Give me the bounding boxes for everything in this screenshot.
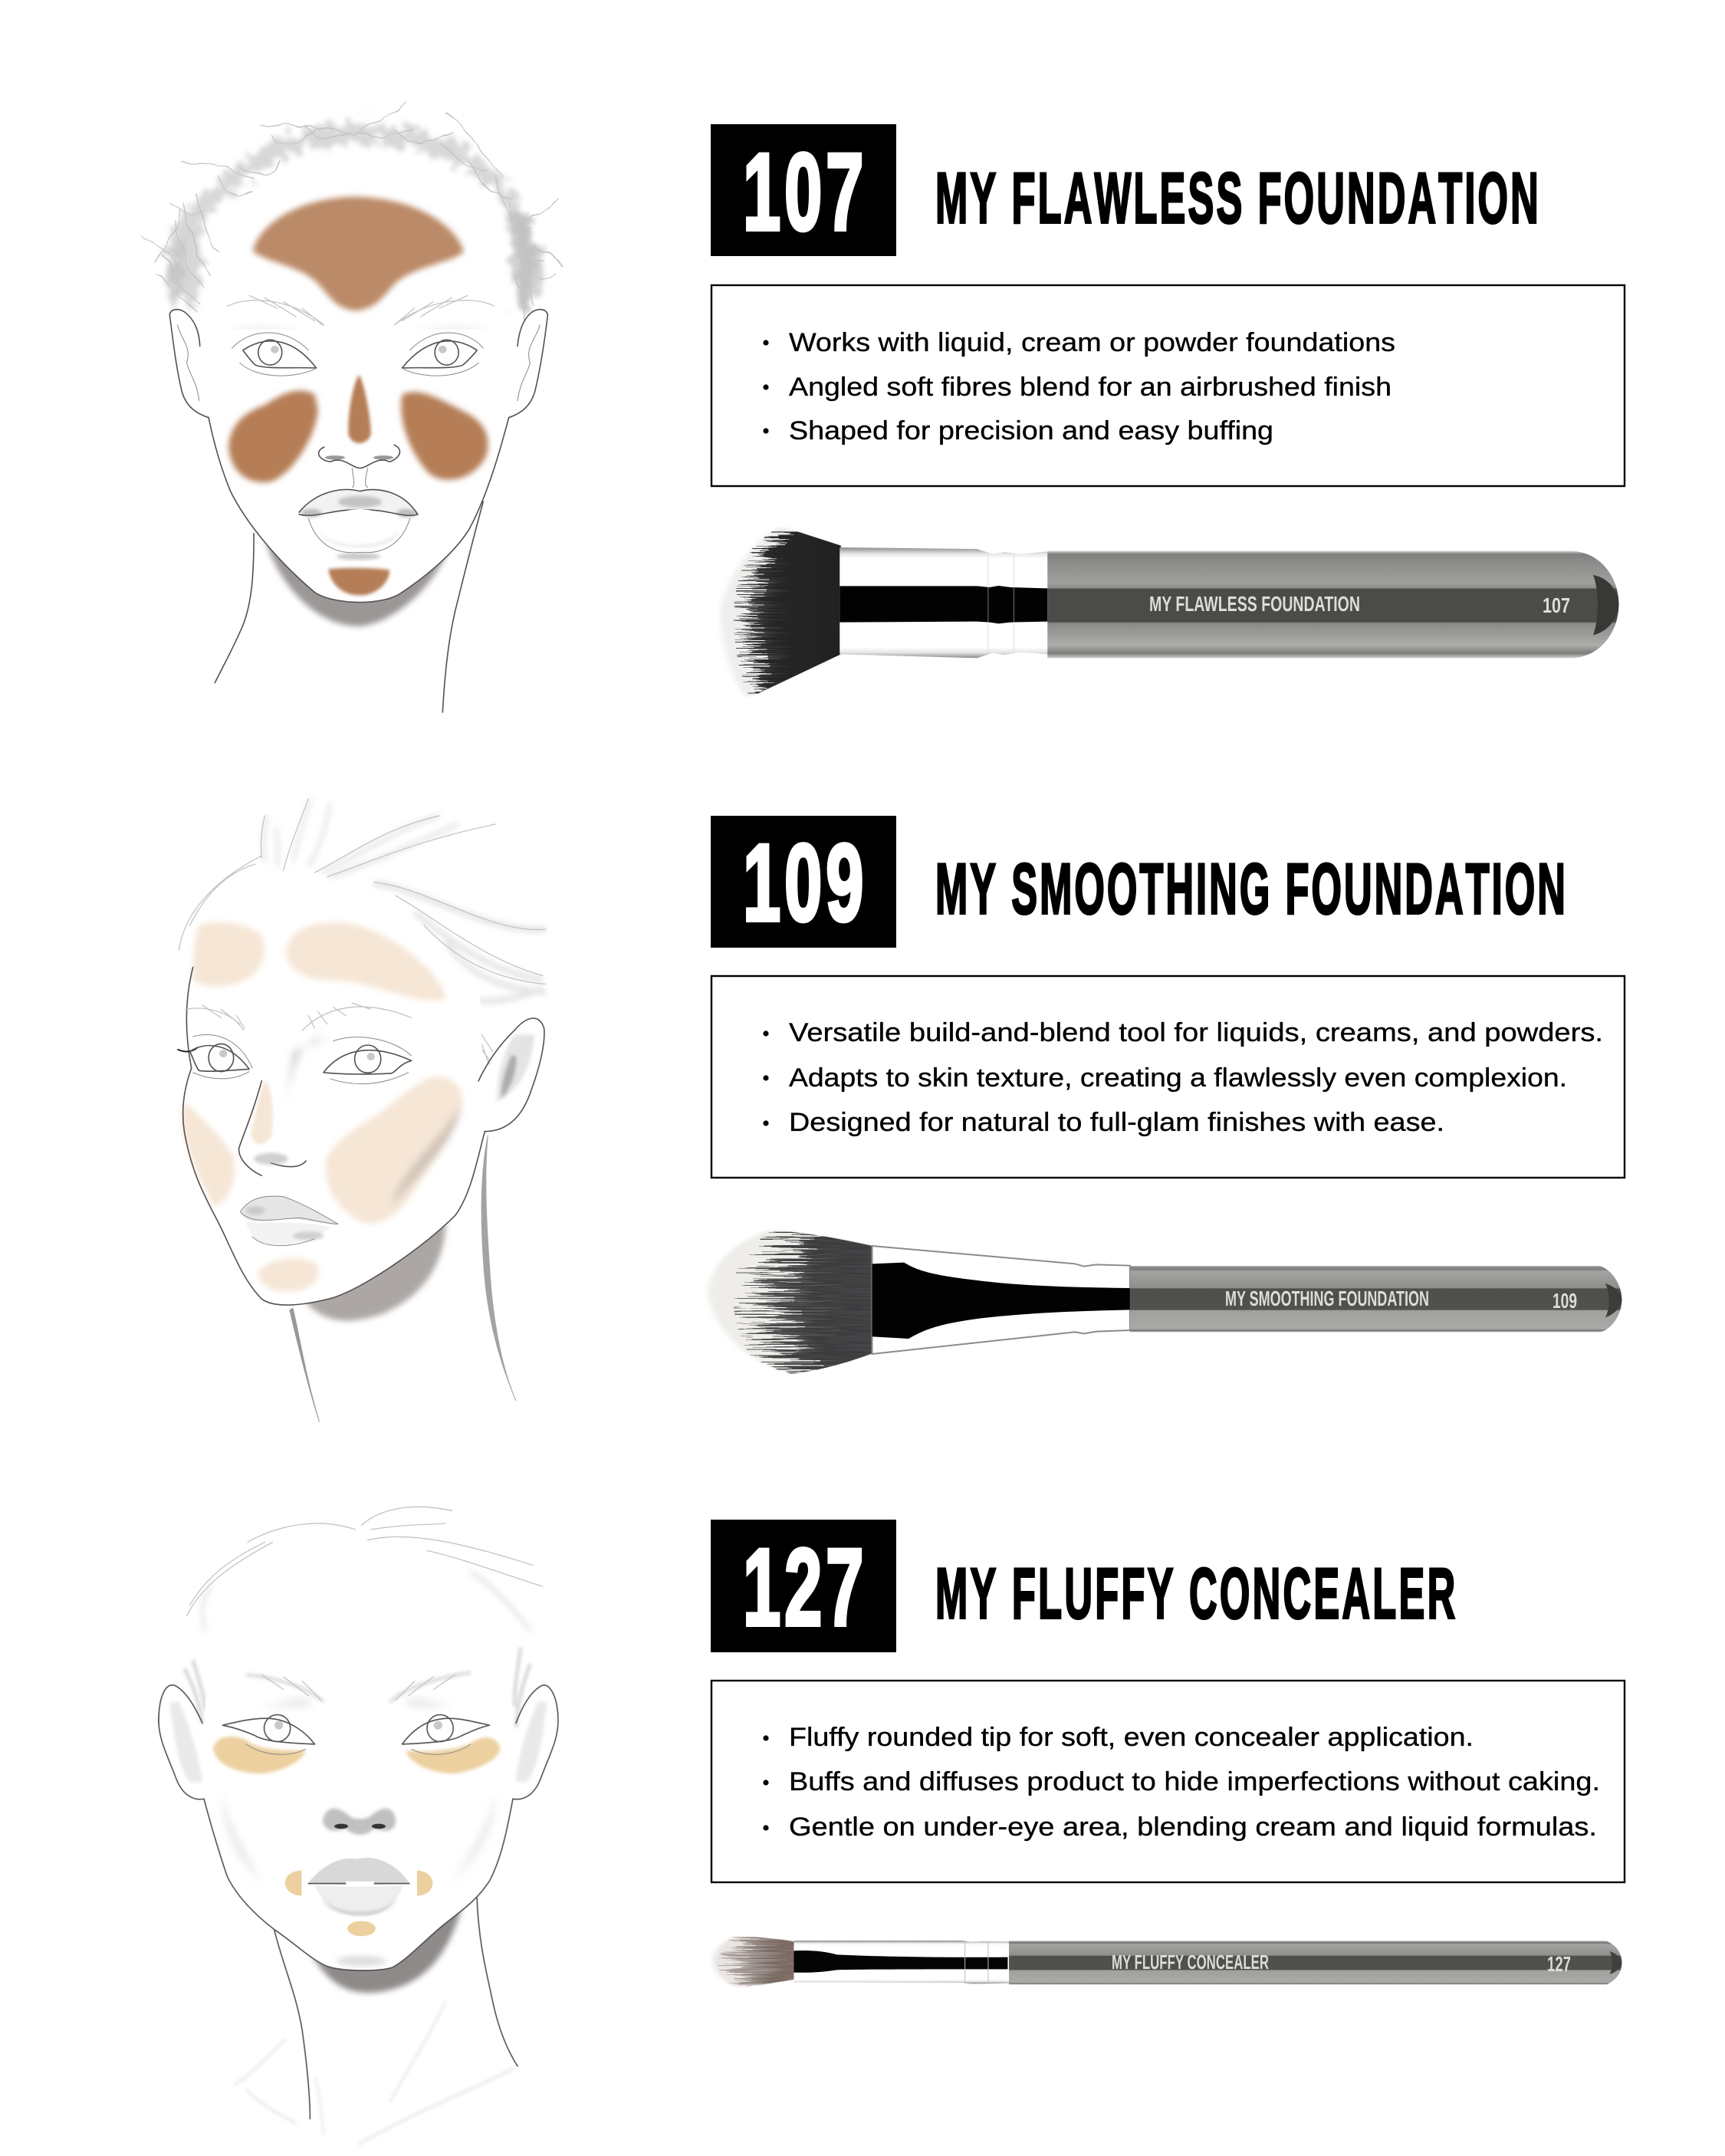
cheek contour shading xyxy=(389,1106,462,1207)
number badge 107: 107 xyxy=(743,131,863,254)
brush 127 label: MY FLUFFY CONCEALER xyxy=(1112,1951,1269,1974)
makeup zone: right cheek xyxy=(401,392,488,480)
brush 127 number: 127 xyxy=(1547,1952,1571,1976)
panel: 109 benefits list: Adapts to skin texture, creating a flawlessly even complexion. xyxy=(789,1063,1567,1093)
heading: my flawless foundation: MY FLAWLESS FOUNDATION xyxy=(935,159,1539,239)
face outline: 127 xyxy=(159,1685,558,2144)
face fill: 109 xyxy=(183,968,485,1305)
jaw shadow: 109 face xyxy=(296,1220,445,1321)
makeup zone: left lip corner xyxy=(285,1871,301,1896)
brush 107 bristles xyxy=(721,527,841,697)
number badge 127: 127 xyxy=(743,1527,863,1649)
makeup zone: right under-eye xyxy=(406,1737,501,1773)
face outline: 107 xyxy=(169,310,548,712)
eyes: 127 xyxy=(222,1714,489,1754)
nose: 127 xyxy=(323,1809,396,1835)
number badge 109: 109 xyxy=(743,822,863,945)
brush 107 xyxy=(721,527,1618,698)
brush 109 number: 109 xyxy=(1552,1289,1577,1313)
makeup zone: left forehead xyxy=(192,922,264,987)
jaw shadow: 127 face xyxy=(302,1908,462,1993)
heading: my smoothing foundation: MY SMOOTHING FOUNDATION xyxy=(935,850,1566,930)
makeup zone: nose xyxy=(251,1080,273,1144)
heading: my fluffy concealer: MY FLUFFY CONCEALER xyxy=(935,1554,1455,1635)
brows: 109 xyxy=(186,1003,412,1030)
number badge 127 xyxy=(711,1520,896,1652)
brush 127 handle xyxy=(1009,1941,1622,1984)
panel: 127 benefits list: Gentle on under-eye area, blending cream and liquid formulas. xyxy=(789,1813,1597,1842)
makeup zone: nose xyxy=(348,375,371,443)
brush 109 ferrule xyxy=(872,1246,1130,1354)
makeup zone: center forehead xyxy=(286,922,445,1001)
face outline: 109 xyxy=(183,968,544,1421)
brush 127 ferrule xyxy=(794,1941,1009,1983)
panel: 107 benefits list: Works with liquid, cream or powder foundations xyxy=(789,328,1395,357)
hair: 127 face xyxy=(184,1507,543,1727)
brush 127 bristles xyxy=(711,1936,794,1987)
makeup zone: forehead xyxy=(253,196,464,311)
hair: 107 face xyxy=(143,102,564,320)
section: 109 my smoothing foundation xyxy=(177,799,1625,1421)
brush 107 ferrule xyxy=(840,547,1047,658)
makeup zone: chin xyxy=(328,568,389,595)
lips: 127 xyxy=(308,1858,409,1916)
face illustration: 107 placement map xyxy=(143,102,564,712)
brush 127 xyxy=(713,1934,1622,1988)
eyes: 109 xyxy=(177,1035,412,1102)
makeup zone: left under-eye xyxy=(213,1737,306,1773)
eyes: 107 xyxy=(232,333,483,376)
panel: 109 benefits list: Designed for natural to full-glam finishes with ease. xyxy=(789,1108,1444,1137)
face illustration: 127 placement map xyxy=(159,1507,558,2144)
number badge 107 xyxy=(711,124,896,256)
brows: 127 xyxy=(246,1673,471,1702)
hair: 109 face xyxy=(179,799,546,1064)
panel: 107 benefits list xyxy=(711,285,1625,486)
brows: 107 xyxy=(228,295,495,325)
face illustration: 109 placement map xyxy=(177,799,546,1421)
lips: 109 xyxy=(241,1196,338,1246)
number badge 109 xyxy=(711,816,896,948)
makeup zone: chin xyxy=(347,1921,376,1936)
lips: 107 xyxy=(299,489,418,560)
makeup zone: right lip corner xyxy=(417,1871,432,1896)
makeup zone: chin xyxy=(258,1258,318,1292)
brush 109 bristles xyxy=(708,1230,871,1374)
brush 107 handle xyxy=(1047,551,1618,658)
makeup zone: left cheek xyxy=(228,390,318,482)
brush 107 handle end cap xyxy=(1593,575,1618,635)
face fill: 107 xyxy=(209,329,509,603)
nose: 107 xyxy=(319,445,399,487)
skin shading: 107 face xyxy=(221,327,496,380)
brush 109 label: MY SMOOTHING FOUNDATION xyxy=(1225,1287,1429,1310)
makeup zone: right cheek xyxy=(326,1076,463,1224)
panel: 107 benefits list: Angled soft fibres blend for an airbrushed finish xyxy=(789,373,1392,402)
makeup zone: left cheek xyxy=(182,1102,235,1207)
panel: 107 benefits list: Shaped for precision and easy buffing xyxy=(789,416,1273,445)
jaw shadow: 107 face xyxy=(264,540,452,626)
brush 107 number: 107 xyxy=(1543,593,1570,617)
brush 107 label: MY FLAWLESS FOUNDATION xyxy=(1149,592,1360,616)
brush 109 xyxy=(708,1230,1622,1375)
nose: 109 xyxy=(239,1081,306,1175)
skin shading: 127 face xyxy=(221,1698,496,1966)
brush 127 handle end cap xyxy=(1609,1951,1622,1974)
brush 109 handle end cap xyxy=(1605,1283,1622,1317)
panel: 127 benefits list xyxy=(711,1681,1625,1882)
panel: 127 benefits list: Buffs and diffuses product to hide imperfections without caking. xyxy=(789,1767,1600,1796)
panel: 109 benefits list: Versatile build-and-blend tool for liquids, creams, and powders. xyxy=(789,1018,1603,1047)
brush 109 handle xyxy=(1130,1266,1622,1332)
face fill: 127 xyxy=(204,1698,513,1970)
panel: 109 benefits list xyxy=(711,976,1625,1178)
section: 127 my fluffy concealer xyxy=(159,1507,1625,2144)
section: 107 my flawless foundation xyxy=(143,102,1625,712)
panel: 127 benefits list: Fluffy rounded tip for soft, even concealer application. xyxy=(789,1723,1474,1752)
